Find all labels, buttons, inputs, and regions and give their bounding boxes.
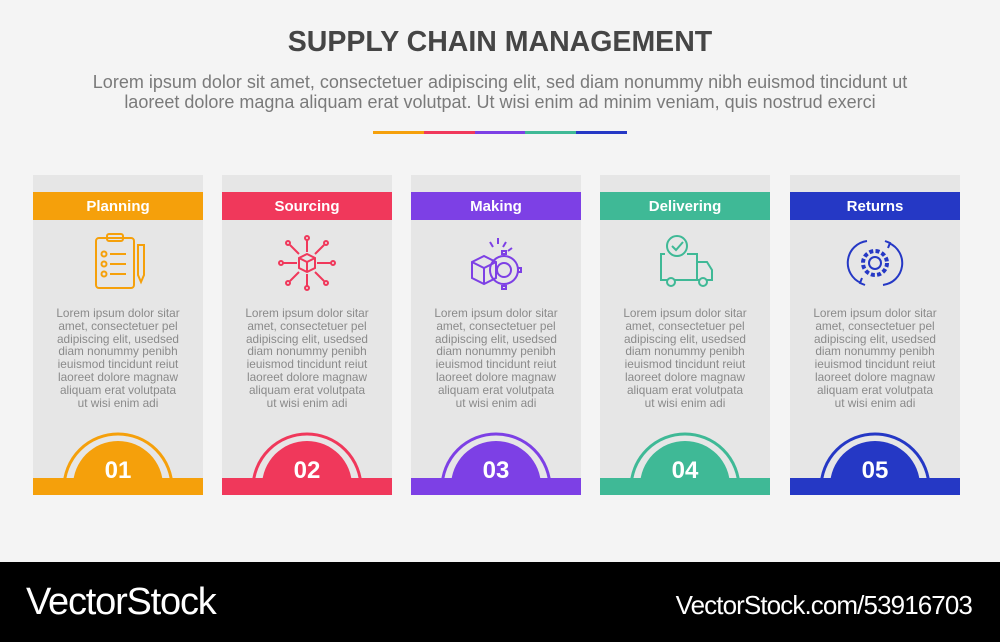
panel: planning: [33, 175, 203, 495]
text: [56, 306, 180, 410]
text: [434, 306, 558, 410]
footer url: VectorStock.com/53916703: [676, 590, 972, 620]
text: aliquam erat volutpata: [817, 383, 933, 397]
text: ut wisi enim adi: [835, 396, 915, 410]
number badge 03: [411, 432, 581, 495]
text: Lorem ipsum dolor sitar: [245, 306, 369, 320]
text: diam nonummy penibh: [436, 344, 556, 358]
text: adipiscing elit, usedsed: [814, 332, 936, 346]
icon: truck with check: [660, 235, 713, 287]
number badge 01: [33, 432, 203, 495]
text: ieuismod tincidunt reiut: [58, 357, 178, 371]
panel: returns: [790, 175, 960, 495]
text: aliquam erat volutpata: [60, 383, 176, 397]
text: diam nonummy penibh: [247, 344, 367, 358]
number badge 02: [222, 432, 392, 495]
heading: Returns: Returns: [847, 198, 903, 215]
number badge 05: 05: [862, 457, 888, 484]
panel: sourcing: [222, 175, 392, 495]
text: aliquam erat volutpata: [627, 383, 743, 397]
number badge 03: 03: [483, 457, 509, 484]
text: laoreet dolore magnaw: [625, 370, 745, 384]
icon: box and gear: [471, 238, 522, 290]
heading: Returns: [790, 192, 960, 220]
heading: Making: [411, 192, 581, 220]
text: ut wisi enim adi: [267, 396, 347, 410]
title: SUPPLY CHAIN MANAGEMENT: [288, 26, 712, 58]
text: laoreet dolore magnaw: [436, 370, 556, 384]
icon: box network: [278, 235, 336, 291]
heading: Making: Making: [470, 198, 522, 215]
number badge 04: 04: [672, 457, 699, 484]
text: laoreet dolore magnaw: [247, 370, 367, 384]
icon: cycle gear: [846, 240, 904, 286]
heading: Planning: [33, 192, 203, 220]
text: ut wisi enim adi: [78, 396, 158, 410]
text: aliquam erat volutpata: [249, 383, 365, 397]
text: amet, consectetuer pel: [815, 319, 935, 333]
subtitle: laoreet dolore magna aliquam erat volutpat. Ut wisi enim ad minim veniam, quis nostrud exerci: [124, 92, 876, 112]
number badge 04: [600, 432, 770, 495]
text: ut wisi enim adi: [645, 396, 725, 410]
text: Lorem ipsum dolor sitar: [813, 306, 937, 320]
text: laoreet dolore magnaw: [815, 370, 935, 384]
heading: Sourcing: [222, 192, 392, 220]
text: ieuismod tincidunt reiut: [625, 357, 745, 371]
text: adipiscing elit, usedsed: [435, 332, 557, 346]
text: ieuismod tincidunt reiut: [436, 357, 556, 371]
text: ut wisi enim adi: [456, 396, 536, 410]
heading: Delivering: Delivering: [649, 198, 721, 215]
text: [245, 306, 369, 410]
text: aliquam erat volutpata: [438, 383, 554, 397]
text: diam nonummy penibh: [815, 344, 935, 358]
number badge 05: [790, 432, 960, 495]
number badge 02: 02: [294, 457, 320, 484]
text: amet, consectetuer pel: [247, 319, 367, 333]
text: ieuismod tincidunt reiut: [815, 357, 935, 371]
footer bar: [0, 562, 1000, 642]
text: amet, consectetuer pel: [58, 319, 178, 333]
text: amet, consectetuer pel: [436, 319, 556, 333]
text: diam nonummy penibh: [58, 344, 178, 358]
panel: making: [411, 175, 581, 495]
text: laoreet dolore magnaw: [58, 370, 178, 384]
text: Lorem ipsum dolor sitar: [623, 306, 747, 320]
text: adipiscing elit, usedsed: [246, 332, 368, 346]
subtitle: Lorem ipsum dolor sit amet, consectetuer adipiscing elit, sed diam nonummy nibh euismod tincidunt ut: [93, 72, 907, 92]
text: [813, 306, 937, 410]
text: [623, 306, 747, 410]
text: ieuismod tincidunt reiut: [247, 357, 367, 371]
text: Lorem ipsum dolor sitar: [56, 306, 180, 320]
subtitle: [93, 72, 908, 112]
heading: Sourcing: Sourcing: [274, 198, 340, 215]
number badge 01: 01: [105, 457, 131, 484]
heading: Delivering: [600, 192, 770, 220]
text: adipiscing elit, usedsed: [57, 332, 179, 346]
color divider: [373, 131, 627, 134]
text: Lorem ipsum dolor sitar: [434, 306, 558, 320]
icon: clipboard: [95, 233, 145, 289]
heading: Planning: Planning: [86, 198, 150, 215]
footer logo: VectorStock: [26, 581, 216, 623]
text: diam nonummy penibh: [625, 344, 745, 358]
text: adipiscing elit, usedsed: [624, 332, 746, 346]
text: amet, consectetuer pel: [625, 319, 745, 333]
panel: delivering: [600, 175, 770, 495]
